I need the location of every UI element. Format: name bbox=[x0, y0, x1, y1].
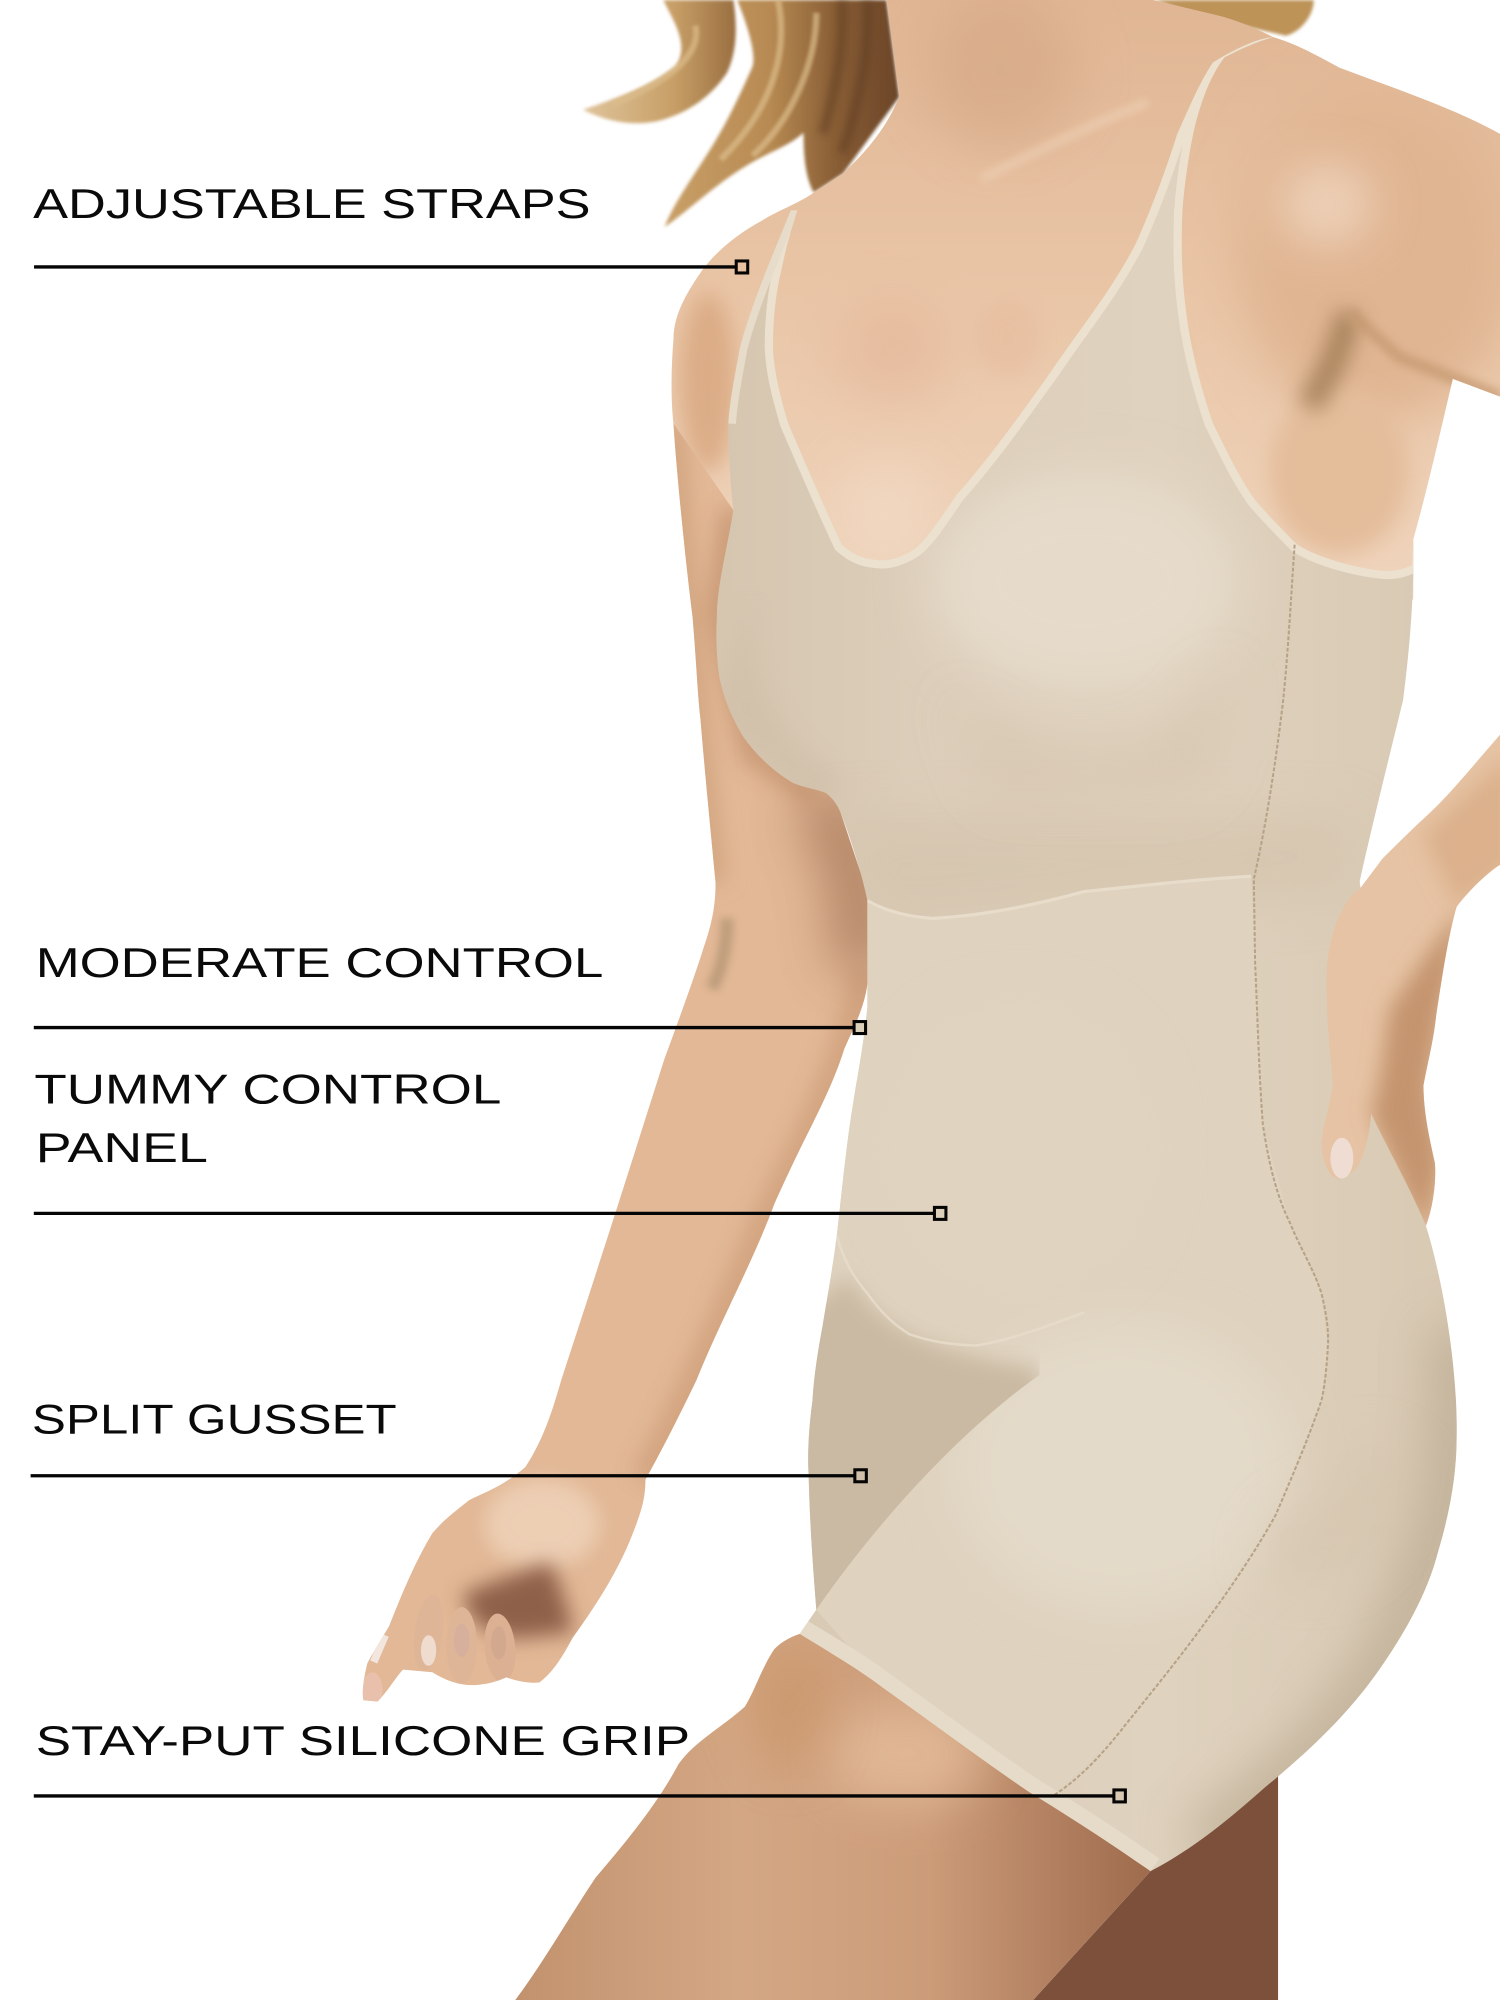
leader line: tummy control panel bbox=[34, 1207, 946, 1219]
garment bbox=[714, 37, 1459, 1871]
arm shading bbox=[362, 423, 867, 1708]
hair bbox=[583, 0, 1314, 227]
waist seam bbox=[867, 876, 1251, 918]
bust underside shadow bbox=[1159, 749, 1185, 767]
side seam bbox=[1055, 545, 1328, 1795]
label: tummy control panel: PANEL bbox=[36, 1124, 208, 1171]
leader line: stay-put silicone grip bbox=[34, 1790, 1125, 1802]
upper bodice tone bbox=[846, 826, 1312, 908]
label: split gusset: SPLIT GUSSET bbox=[32, 1396, 397, 1443]
label: moderate control: MODERATE CONTROL bbox=[36, 939, 603, 986]
leader line: moderate control bbox=[34, 1022, 866, 1034]
tummy lower edge bbox=[836, 1236, 1012, 1347]
label: adjustable straps: ADJUSTABLE STRAPS bbox=[33, 180, 591, 227]
tummy panel bbox=[816, 878, 1252, 1702]
bust highlight bbox=[931, 472, 1237, 689]
far leg shadow bbox=[800, 1278, 1040, 1634]
leader line: adjustable straps bbox=[34, 261, 748, 273]
model figure bbox=[362, 0, 1500, 2000]
hem band bbox=[800, 1634, 1151, 1871]
thigh shading bbox=[750, 1639, 989, 1805]
near thigh bbox=[515, 1634, 1151, 2000]
far thigh bbox=[1033, 1773, 1278, 2000]
leader line: split gusset bbox=[31, 1470, 866, 1482]
label: stay-put silicone grip: STAY-PUT SILICONE GRIP bbox=[36, 1717, 690, 1764]
right hand and forearm on hip bbox=[1321, 735, 1500, 1237]
fingernail bbox=[1330, 1138, 1353, 1179]
hip highlight bbox=[981, 1352, 1264, 1582]
shoulder and armpit shading bbox=[680, 0, 1500, 561]
left arm and hand bbox=[363, 423, 869, 1702]
label: tummy control panel: TUMMY CONTROL bbox=[34, 1065, 501, 1112]
upper torso and right arm skin bbox=[672, 0, 1500, 638]
strap and neckline binding bbox=[773, 37, 1413, 571]
outer side shading bbox=[1199, 1327, 1459, 1849]
